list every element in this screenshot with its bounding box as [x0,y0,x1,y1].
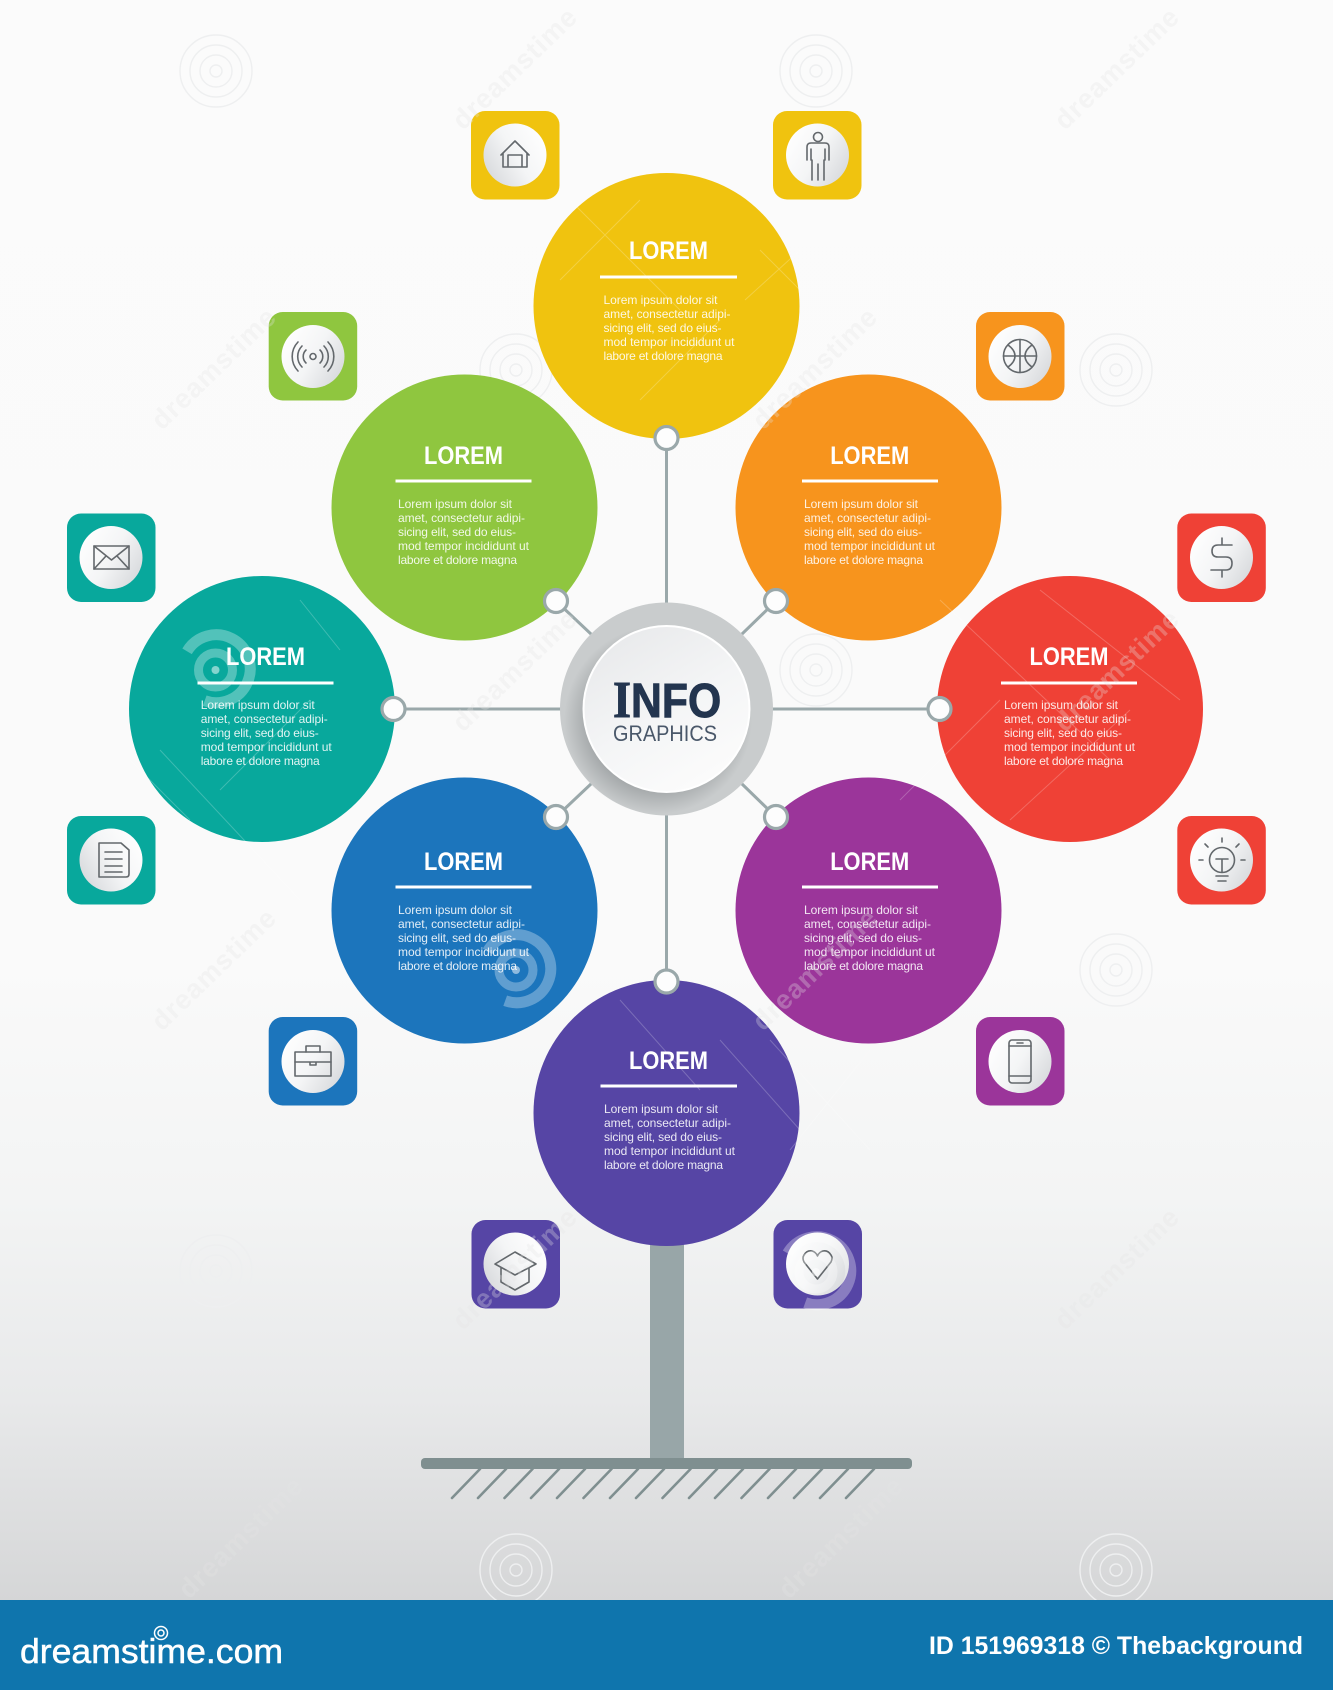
body text: orange: Lorem ipsum dolor sit [804,497,919,511]
body text: blue: mod tempor incididunt ut [398,945,530,959]
tree base and ground hatching [421,1458,912,1498]
footer logo spiral [154,1626,168,1640]
diagonal watermark text [145,1,1185,1604]
body text: green: sicing elit, sed do eius- [398,525,516,539]
circle: teal [129,576,395,842]
diagonal watermark text: dreamstime [172,1470,309,1604]
body text: purple [804,903,936,973]
diagonal watermark text: dreamstime [1048,603,1185,737]
footer credit: ID 151969318 © Thebackground [929,1632,1303,1660]
body text: orange: mod tempor incididunt ut [804,539,936,553]
diagonal watermark text: dreamstime [145,902,282,1036]
body text: indigo [604,1102,736,1172]
icon tile: person [773,111,862,200]
body text: purple: amet, consectetur adipi- [804,917,931,931]
body text: green [398,497,530,567]
body text: teal [201,698,332,768]
circle: orange: LOREM [830,442,909,470]
hub title: INFO [613,671,721,729]
circle: red: LOREM [1030,643,1108,671]
body text: red: labore et dolore magna [1004,754,1123,768]
body text: green: mod tempor incididunt ut [398,539,530,553]
body text: blue: Lorem ipsum dolor sit [398,903,513,917]
body text: teal: sicing elit, sed do eius- [201,726,319,740]
circle: teal: LOREM [226,643,305,671]
icon tile: heart [774,1220,862,1308]
circle: orange [736,374,1002,640]
diagonal watermark text: dreamstime [746,902,883,1036]
circle: blue [332,778,598,1044]
body text: teal: Lorem ipsum dolor sit [201,698,315,712]
icon tile: wifi [269,312,357,400]
watermark spirals over circles [170,622,863,1317]
body text: green: amet, consectetur adipi- [398,511,525,525]
body text: blue: sicing elit, sed do eius- [398,931,516,945]
footer logo: dreamstime.com [20,1633,283,1671]
body text: yellow: sicing elit, sed do eius- [604,321,722,335]
circle: indigo [534,980,800,1246]
diagonal watermark text: dreamstime [145,301,282,435]
body text: orange [804,497,936,567]
icon tile: graduation cap [472,1220,560,1308]
background watermark spirals [180,35,1152,1606]
diagonal watermark text: dreamstime [446,1,583,135]
diagonal watermark text: dreamstime [746,301,883,435]
body text: yellow: amet, consectetur adipi- [604,307,730,321]
icon tile: light bulb [1177,816,1266,904]
body text: orange: sicing elit, sed do eius- [804,525,922,539]
body text: teal: amet, consectetur adipi- [201,712,328,726]
icon tile: dollar [1177,514,1266,602]
body text: green: Lorem ipsum dolor sit [398,497,513,511]
body text: red: amet, consectetur adipi- [1004,712,1131,726]
body text: teal: labore et dolore magna [201,754,320,768]
icon tile: home [471,111,560,200]
body text: indigo: sicing elit, sed do eius- [604,1130,722,1144]
diagonal watermark text: dreamstime [446,1201,583,1335]
circle: blue: LOREM [424,848,503,876]
body text: red: Lorem ipsum dolor sit [1004,698,1119,712]
diagonal watermark text: dreamstime [772,1470,909,1604]
circle: green: LOREM [424,442,503,470]
tree trunk [650,1235,684,1461]
body text: purple: sicing elit, sed do eius- [804,931,922,945]
diagonal watermark text: dreamstime [1048,1,1185,135]
body text: yellow [604,293,735,363]
body text: blue [398,903,530,973]
hub subtitle: GRAPHICS [613,721,717,746]
icon tile: briefcase [269,1017,357,1106]
faint watermark lines [130,200,1180,1150]
circle: purple: LOREM [830,848,909,876]
circle: yellow [534,173,800,439]
body text: purple: Lorem ipsum dolor sit [804,903,919,917]
body text: indigo: mod tempor incididunt ut [604,1144,736,1158]
body text: indigo: labore et dolore magna [604,1158,723,1172]
circle: green [332,374,598,640]
body text: orange: amet, consectetur adipi- [804,511,931,525]
connector nodes [382,426,951,993]
body text: red: mod tempor incididunt ut [1004,740,1136,754]
body text: yellow: labore et dolore magna [604,349,723,363]
icon tile: document [67,816,156,904]
body text: red [1004,698,1136,768]
body text: purple: labore et dolore magna [804,959,923,973]
footer bar [0,1600,1333,1690]
body text: blue: amet, consectetur adipi- [398,917,525,931]
diagonal watermark text: dreamstime [446,603,583,737]
body text: indigo: amet, consectetur adipi- [604,1116,731,1130]
body text: purple: mod tempor incididunt ut [804,945,936,959]
body text: yellow: Lorem ipsum dolor sit [604,293,718,307]
icon tile: mail [67,514,156,602]
body text: indigo: Lorem ipsum dolor sit [604,1102,719,1116]
body text: orange: labore et dolore magna [804,553,923,567]
icon tile: basketball [976,312,1064,400]
body text: blue: labore et dolore magna [398,959,517,973]
circle: purple [736,778,1002,1044]
body text: teal: mod tempor incididunt ut [201,740,332,754]
central hub [560,602,773,816]
circle: yellow: LOREM [629,237,708,265]
circle: red [937,576,1203,842]
connector lines from hub to nodes [393,440,940,980]
icon tile: phone [976,1017,1064,1106]
body text: yellow: mod tempor incididunt ut [604,335,735,349]
diagonal watermark text: dreamstime [1048,1201,1185,1335]
body text: red: sicing elit, sed do eius- [1004,726,1122,740]
circle: indigo: LOREM [629,1047,708,1075]
body text: green: labore et dolore magna [398,553,517,567]
